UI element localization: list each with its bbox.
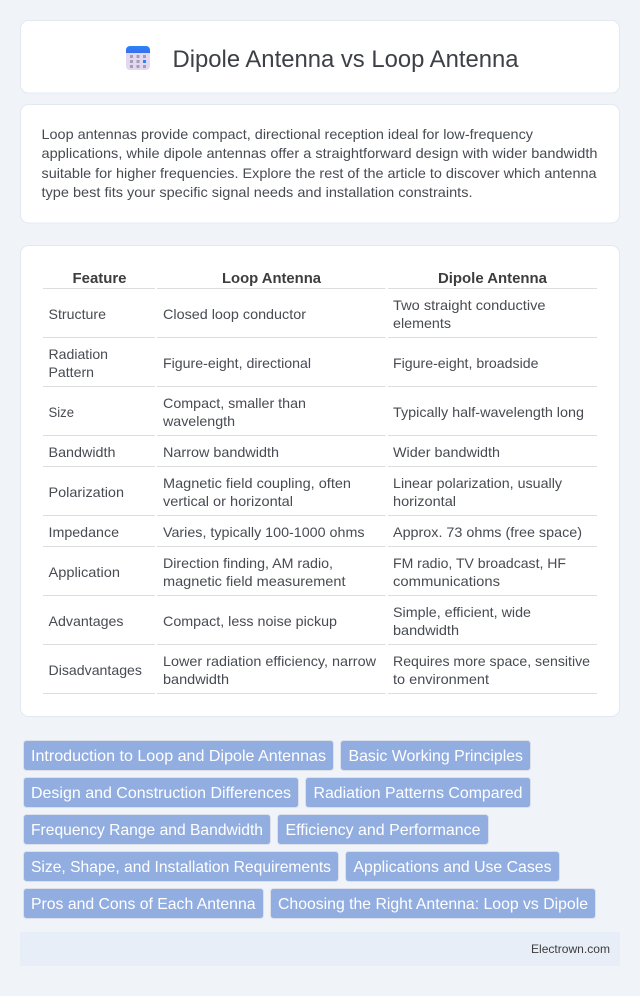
row: disadvantages bbox=[48, 653, 590, 687]
row: disadvantages: to environment bbox=[393, 671, 489, 687]
row: size: wavelength bbox=[162, 413, 235, 429]
row: bandwidth: Bandwidth bbox=[48, 444, 116, 460]
tag: introduction: Introduction to Loop and Dipole Antennas bbox=[31, 748, 326, 765]
tag: pros and cons: Pros and Cons of Each Antenna bbox=[31, 896, 256, 913]
row: polarization: Polarization bbox=[48, 484, 124, 500]
tag: applications bbox=[346, 852, 560, 882]
row: polarization: Linear polarization, usually bbox=[393, 475, 562, 491]
row: bandwidth bbox=[48, 444, 500, 460]
row: advantages bbox=[48, 604, 531, 638]
row: application: Application bbox=[48, 564, 120, 580]
text block: intro paragraph: Loop antennas provide compact, directional reception ideal for low-frequency bbox=[42, 126, 533, 142]
row: size: Compact, smaller than bbox=[163, 395, 306, 411]
row: disadvantages: Disadvantages bbox=[48, 662, 142, 678]
topic tags bbox=[24, 740, 596, 918]
tag: applications: Applications and Use Cases bbox=[354, 859, 552, 876]
row: application: communications bbox=[393, 573, 500, 589]
row: radiation pattern: Figure-eight, directional bbox=[163, 355, 311, 371]
table header bbox=[72, 271, 548, 287]
tag: design differences bbox=[24, 778, 298, 808]
row: radiation pattern: Figure-eight, broadside bbox=[393, 355, 539, 371]
row: disadvantages: Requires more space, sensitive bbox=[393, 653, 590, 669]
panel: header bbox=[20, 20, 620, 93]
row: polarization: horizontal bbox=[393, 493, 456, 509]
icon: calendar bbox=[126, 46, 150, 70]
tag: design differences: Design and Construction Differences bbox=[31, 785, 291, 802]
row: size bbox=[48, 395, 584, 429]
row: impedance bbox=[48, 524, 582, 540]
row: impedance: Approx. 73 ohms (free space) bbox=[393, 524, 582, 540]
panel: comparison table bbox=[20, 246, 620, 716]
row: size: Size bbox=[48, 404, 74, 420]
row: radiation pattern: Pattern bbox=[48, 364, 94, 380]
table header: Feature bbox=[72, 271, 126, 287]
row: structure bbox=[48, 297, 546, 331]
row: structure: Structure bbox=[48, 306, 106, 322]
panel: introduction bbox=[20, 104, 620, 223]
row: structure: elements bbox=[393, 315, 451, 331]
tag: frequency range: Frequency Range and Bandwidth bbox=[31, 822, 263, 839]
row: advantages: Simple, efficient, wide bbox=[393, 604, 531, 620]
tag: radiation patterns bbox=[306, 778, 530, 808]
tag: size and shape bbox=[24, 852, 338, 882]
text block: intro paragraph: type best fits your specific signal needs and installation constraints. bbox=[42, 184, 472, 200]
tag: choosing bbox=[270, 888, 596, 918]
tag: radiation patterns: Radiation Patterns Compared bbox=[314, 785, 522, 802]
row: structure: Closed loop conductor bbox=[163, 306, 306, 322]
table header: Dipole Antenna bbox=[438, 271, 548, 287]
tag: pros and cons bbox=[24, 888, 264, 918]
row: radiation pattern: Radiation bbox=[48, 346, 108, 362]
row: polarization: Magnetic field coupling, often bbox=[163, 475, 351, 491]
row: size: Typically half-wavelength long bbox=[393, 404, 584, 420]
row: advantages: Advantages bbox=[48, 613, 124, 629]
tag: introduction bbox=[24, 740, 334, 770]
row: structure: Two straight conductive bbox=[393, 297, 546, 313]
row: advantages: bandwidth bbox=[393, 622, 459, 638]
row: impedance: Impedance bbox=[48, 524, 119, 540]
row: application: Direction finding, AM radio, bbox=[163, 555, 333, 571]
text block: intro paragraph: suitable for higher frequencies. Explore the rest of the article to discover which antenna bbox=[42, 165, 597, 181]
row: bandwidth: Narrow bandwidth bbox=[163, 444, 279, 460]
tag: working principles: Basic Working Principles bbox=[348, 748, 523, 765]
tag: working principles bbox=[340, 740, 530, 770]
text block: intro paragraph bbox=[42, 126, 598, 200]
row: polarization: vertical or horizontal bbox=[163, 493, 293, 509]
tag: choosing: Choosing the Right Antenna: Loop vs Dipole bbox=[278, 896, 588, 913]
row: disadvantages: Lower radiation efficiency, narrow bbox=[163, 653, 377, 669]
row: polarization bbox=[48, 475, 562, 509]
table header: Loop Antenna bbox=[222, 271, 322, 287]
tag: frequency range bbox=[24, 814, 270, 844]
footer credit: Electrown.com bbox=[531, 942, 610, 956]
tag: size and shape: Size, Shape, and Installation Requirements bbox=[31, 859, 331, 876]
row: disadvantages: bandwidth bbox=[163, 671, 229, 687]
row: advantages: Compact, less noise pickup bbox=[163, 613, 337, 629]
row: application: FM radio, TV broadcast, HF bbox=[393, 555, 566, 571]
row: application bbox=[48, 555, 566, 589]
title: Dipole Antenna vs Loop Antenna bbox=[172, 46, 519, 73]
footer bbox=[20, 932, 620, 966]
row: application: magnetic field measurement bbox=[163, 573, 346, 589]
row: radiation pattern bbox=[48, 346, 539, 380]
tag: efficiency bbox=[278, 814, 488, 844]
row: impedance: Varies, typically 100-1000 ohms bbox=[163, 524, 364, 540]
text block: intro paragraph: applications, while dipole antennas offer a straightforward design with wider bandwidth bbox=[42, 145, 598, 161]
tag: efficiency: Efficiency and Performance bbox=[286, 822, 481, 839]
row: bandwidth: Wider bandwidth bbox=[393, 444, 500, 460]
